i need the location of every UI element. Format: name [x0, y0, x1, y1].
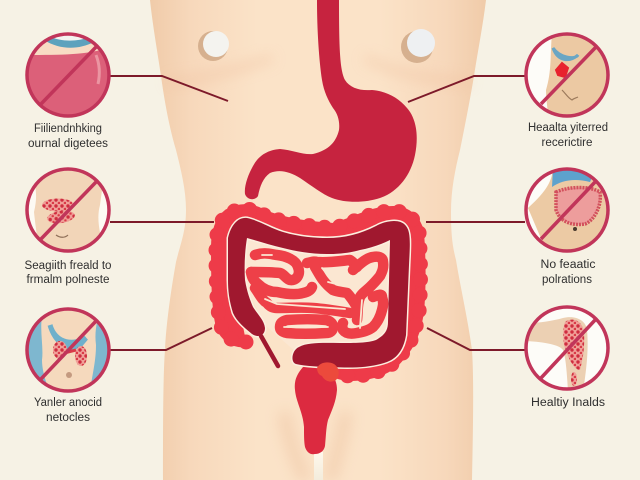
- caption: netocles: [46, 412, 90, 424]
- stomach and esophagus: [245, 0, 417, 202]
- caption: [528, 122, 608, 149]
- caption: Heaalta yiterred: [528, 122, 608, 134]
- left nipple: [198, 31, 229, 61]
- groin shading: [284, 412, 346, 480]
- caption: Yanler anocid: [34, 397, 102, 409]
- icon: arm rash prohibited: [526, 307, 610, 392]
- caption: Healtiy Inalds: [531, 397, 605, 409]
- panel: bottom right: [526, 307, 610, 409]
- caption: frmalm polneste: [26, 274, 110, 286]
- icon: torso prohibited: [26, 309, 110, 393]
- caption: No feaatic: [540, 259, 596, 271]
- caption: [24, 260, 112, 286]
- inner cavity: [245, 236, 392, 352]
- icon: flank prohibited: [526, 33, 610, 117]
- bright junction patch: [317, 362, 339, 382]
- leg gap: [314, 452, 323, 480]
- appendix: [261, 336, 278, 366]
- panel: top right: [526, 33, 610, 149]
- panel: bottom left: [26, 309, 110, 424]
- intestine highlights: [262, 255, 362, 328]
- caption: ournal digetees: [28, 138, 108, 150]
- right nipple: [401, 29, 435, 63]
- rectum: [295, 365, 337, 454]
- icon: abdomen prohibited: [26, 168, 110, 255]
- icon: colon abdomen prohibited: [526, 168, 610, 255]
- small intestine: [251, 253, 383, 334]
- colon: [228, 218, 410, 367]
- panel: top left: [26, 33, 110, 150]
- haustra band: [216, 209, 420, 376]
- caption: polrations: [542, 274, 592, 286]
- panel: middle left: [24, 168, 112, 286]
- icon: stomach lining prohibited: [26, 33, 110, 117]
- caption: recerictire: [542, 137, 592, 149]
- caption: [28, 123, 108, 150]
- large intestine: [216, 209, 420, 382]
- panel: middle right: [526, 168, 610, 286]
- caption: Fiiliendnhking: [34, 123, 102, 135]
- chest shading: [168, 58, 470, 82]
- caption: Seagiith freald to: [24, 260, 112, 272]
- caption: [540, 259, 596, 286]
- caption: [34, 397, 102, 424]
- torso: [150, 0, 486, 480]
- connector lines: [110, 76, 525, 350]
